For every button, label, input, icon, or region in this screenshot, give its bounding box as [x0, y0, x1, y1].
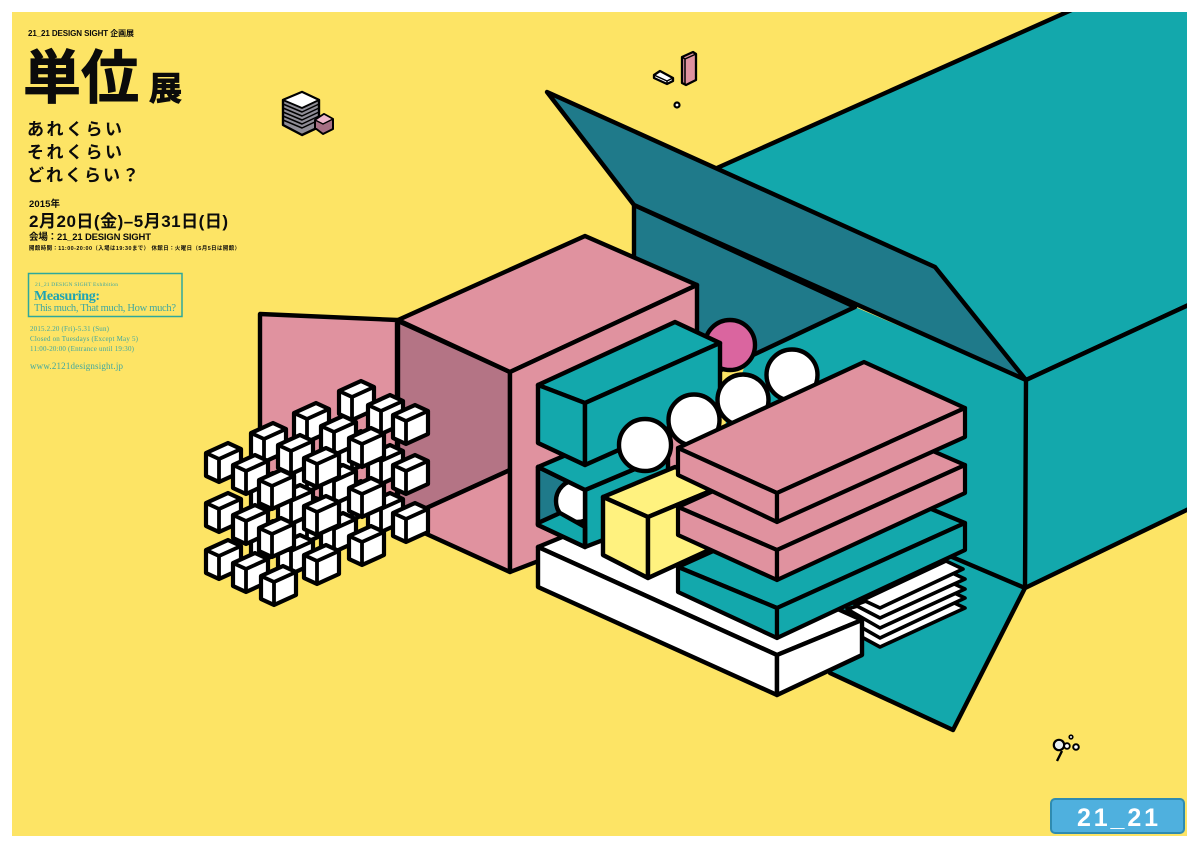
title: 単位	[23, 46, 139, 111]
box inner dark back wall	[632, 206, 858, 372]
english title box	[28, 274, 182, 316]
box top face	[717, 8, 1195, 380]
exhibition dates in Japanese: 2015年	[29, 198, 60, 210]
english dates and hours: 2015.2.20 (Fri)-5.31 (Sun)	[30, 325, 110, 333]
exhibition dates in Japanese: 開館時間：11:00-20:00（入場は19:30まで） 休館日：火曜日（5月5日は開館）	[29, 244, 240, 252]
logo: 21_21	[1051, 799, 1184, 833]
icon: small circles and stick	[1054, 735, 1079, 761]
white balls	[619, 350, 818, 471]
teal cardboard box	[547, 8, 1195, 730]
box dark flap	[547, 92, 1026, 380]
text: organiser line: 21_21 DESIGN SIGHT 企画展	[28, 28, 134, 38]
english title box: This much, That much, How much?	[34, 303, 176, 314]
icon: paper stack small	[283, 92, 333, 135]
exhibition dates in Japanese	[29, 198, 240, 252]
box inner wall and bottom flap	[700, 307, 1026, 730]
pink box	[260, 236, 697, 572]
pink box inner dark wall	[398, 321, 510, 521]
english dates and hours: 11:00-20:00 (Entrance until 19:30)	[30, 345, 135, 353]
yellow cube	[603, 467, 720, 578]
icon: pink ball	[705, 320, 755, 370]
lower teal hollow block	[536, 452, 670, 550]
title: 展	[149, 70, 182, 107]
box right face	[1025, 302, 1195, 588]
logo: 21_21: 21_21	[1077, 804, 1158, 832]
english dates and hours	[30, 325, 139, 353]
paper stack	[847, 561, 965, 647]
white cube cluster	[206, 381, 428, 605]
tagline	[27, 120, 139, 185]
upper teal block	[538, 322, 720, 465]
pink box top	[398, 236, 697, 372]
teal slab	[678, 482, 965, 638]
icon: small floating blocks	[654, 52, 696, 108]
pink left flap	[260, 314, 397, 522]
pink box floor	[398, 470, 510, 572]
english dates and hours: Closed on Tuesdays (Except May 5)	[30, 335, 139, 343]
english title box: 21_21 DESIGN SIGHT Exhibition	[35, 282, 118, 288]
pink box front	[510, 285, 697, 572]
website url: www.2121designsight.jp	[30, 361, 124, 371]
tagline: それくらい	[27, 143, 122, 162]
white slab	[538, 512, 862, 695]
tagline: あれくらい	[27, 120, 122, 139]
exhibition dates in Japanese: 会場：21_21 DESIGN SIGHT	[29, 231, 151, 243]
exhibition dates in Japanese: 2月20日(金)–5月31日(日)	[29, 211, 228, 231]
lower pink slab	[678, 422, 965, 580]
english title box: Measuring:	[34, 289, 100, 304]
upper pink slab	[678, 362, 965, 522]
tagline: どれくらい？	[27, 166, 139, 185]
